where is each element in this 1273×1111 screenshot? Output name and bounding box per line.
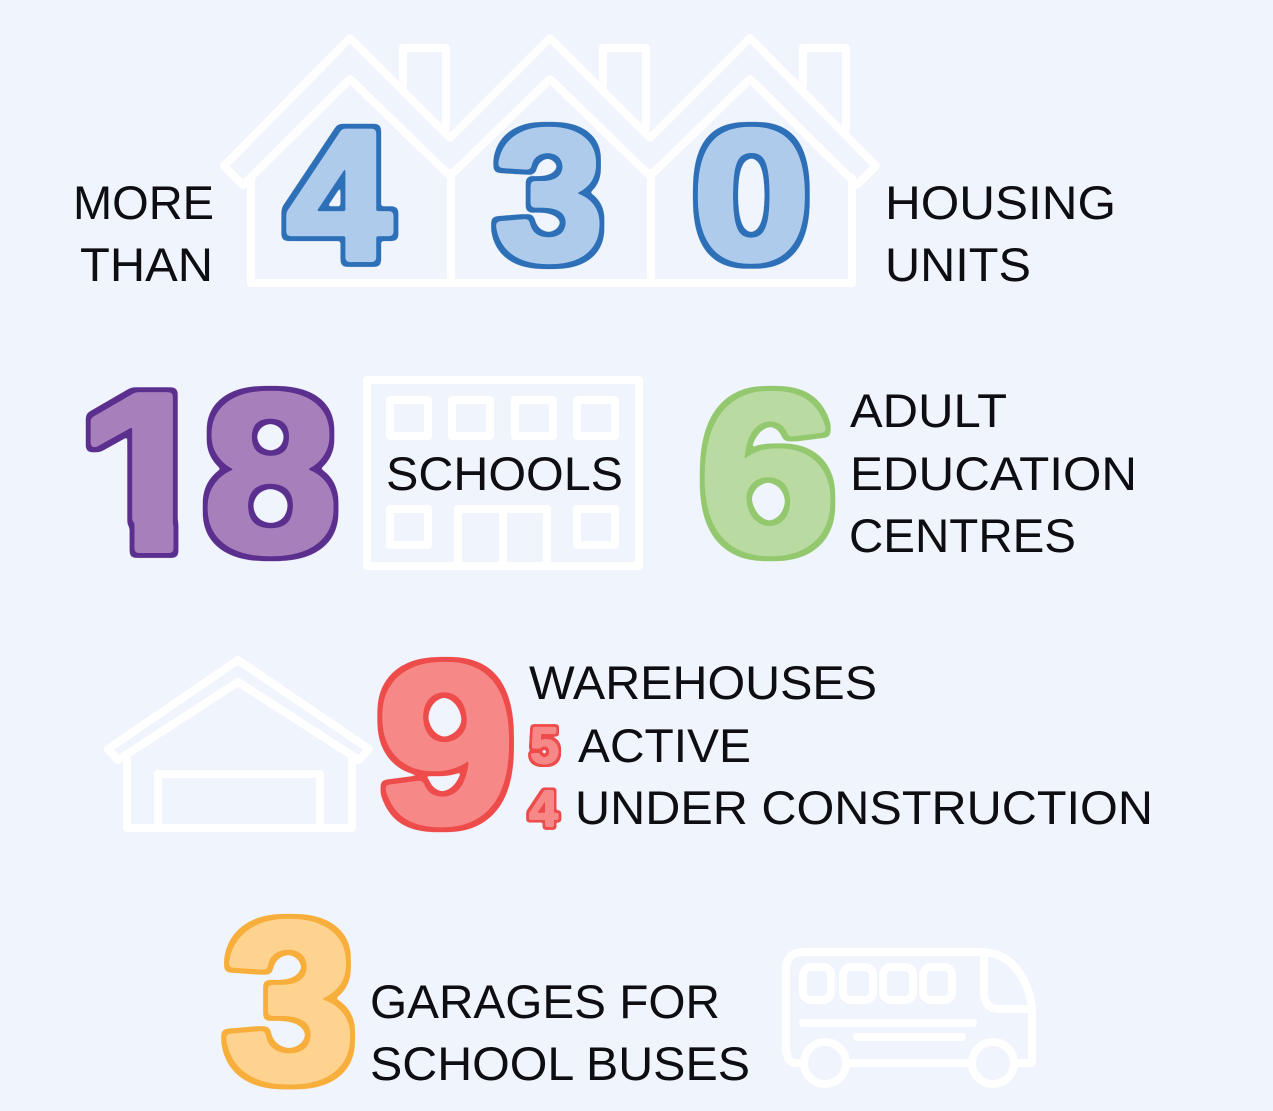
label: schools: SCHOOLS xyxy=(386,447,623,500)
number: 430: 0 xyxy=(692,93,810,299)
label: warehouses: 5 xyxy=(530,717,559,774)
icon: school bus xyxy=(786,952,1032,1084)
label: warehouses: UNDER CONSTRUCTION xyxy=(575,781,1153,834)
label: housing units xyxy=(885,176,1116,291)
number: 6: 6 xyxy=(699,347,836,599)
label: more than: THAN xyxy=(80,238,213,291)
label: housing units: HOUSING xyxy=(885,176,1116,229)
icon: warehouse xyxy=(108,660,369,828)
label: garages for school buses xyxy=(370,975,750,1090)
label: housing units: UNITS xyxy=(885,238,1031,291)
icon: school building xyxy=(367,380,639,566)
icon: row of houses xyxy=(224,38,876,283)
number: 430 xyxy=(286,93,810,299)
number: 18 xyxy=(86,386,339,562)
label: garages for school buses: GARAGES FOR xyxy=(370,975,720,1028)
label: garages for school buses: SCHOOL BUSES xyxy=(370,1037,750,1090)
number: 430: 3 xyxy=(494,93,604,299)
number: 18: 1 xyxy=(76,346,216,598)
label: warehouses: ACTIVE xyxy=(578,719,751,772)
number: 18: 8 xyxy=(203,347,338,599)
label: warehouses: 4 xyxy=(529,780,559,837)
label: more than xyxy=(73,176,214,291)
label: adult education centres: EDUCATION xyxy=(850,447,1137,500)
label: adult education centres: CENTRES xyxy=(849,509,1076,562)
number: 430: 4 xyxy=(286,93,392,299)
label: adult education centres xyxy=(849,384,1137,562)
label: warehouses xyxy=(529,656,1153,837)
label: warehouses: WAREHOUSES xyxy=(529,656,877,709)
label: more than: MORE xyxy=(73,176,214,229)
label: adult education centres: ADULT xyxy=(850,384,1007,437)
number: 9: 9 xyxy=(377,618,515,870)
